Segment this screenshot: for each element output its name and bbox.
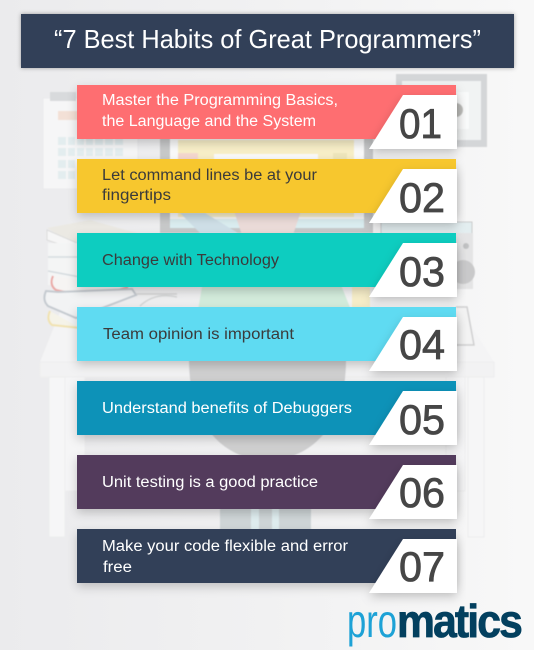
habit 07: free — [103, 559, 132, 576]
programmer figure — [189, 205, 351, 535]
monitor — [160, 130, 373, 233]
habit 02: Let command lines be at your — [102, 167, 317, 184]
desk — [40, 307, 494, 537]
habit 07: Make your code flexible and error — [102, 538, 348, 555]
habit 01: 01 — [399, 100, 442, 147]
habit 04: Team opinion is important — [103, 326, 295, 343]
habit 03: Change with Technology — [102, 252, 279, 269]
habit 01: Master the Programming Basics, — [102, 92, 338, 109]
habit 05: Understand benefits of Debuggers — [102, 400, 352, 417]
habit 05: 05 — [399, 396, 445, 443]
habit 06: 06 — [399, 469, 445, 516]
habit 02 — [77, 159, 457, 223]
habit 06: Unit testing is a good practice — [102, 474, 318, 491]
title banner: “7 Best Habits of Great Programmers” — [54, 24, 481, 54]
habit 07 — [77, 529, 457, 593]
speaker and tablet — [352, 222, 475, 345]
habit 01 — [77, 85, 457, 149]
logo: promatics — [347, 595, 521, 647]
logo: promatics: matics — [397, 595, 521, 647]
habit 02: fingertips — [102, 187, 171, 204]
habit 03 — [77, 233, 457, 297]
habit 04: 04 — [399, 321, 445, 368]
books and glasses — [44, 220, 177, 328]
habit 06 — [77, 455, 457, 519]
title banner — [21, 14, 514, 68]
logo: promatics: pro — [347, 595, 397, 647]
habit 03: 03 — [399, 248, 445, 295]
picture frame — [396, 74, 487, 147]
calendar — [43, 92, 138, 189]
habit 04 — [77, 307, 457, 371]
habit 02: 02 — [399, 174, 445, 221]
habit 07: 07 — [399, 543, 445, 590]
habit 05 — [77, 381, 457, 445]
background illustration: programmer at desk — [40, 74, 494, 537]
habit 01: the Language and the System — [102, 113, 316, 130]
